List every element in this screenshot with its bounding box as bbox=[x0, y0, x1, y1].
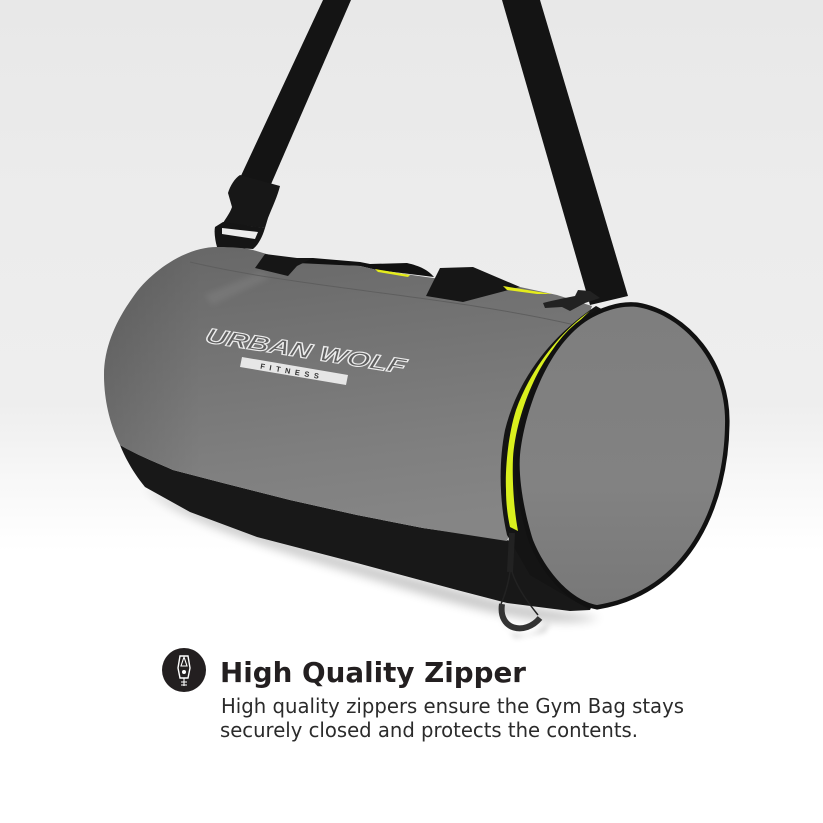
description bbox=[220, 694, 684, 742]
handle bases bbox=[255, 254, 520, 302]
feature block bbox=[162, 648, 684, 742]
logo: Urban Wolf Fitness: URBAN WOLF bbox=[203, 325, 410, 379]
body upper bbox=[104, 247, 592, 541]
fabric highlight bbox=[205, 272, 270, 305]
product: gym bag bbox=[104, 0, 725, 628]
description: High quality zippers ensure the Gym Bag stays bbox=[221, 694, 684, 718]
yellow zipper top bbox=[375, 269, 552, 294]
icon: zipper bbox=[162, 648, 206, 692]
end cap panel bbox=[520, 307, 725, 605]
zipper yellow bbox=[506, 311, 590, 531]
shoulder strap left bbox=[215, 0, 351, 249]
logo: Urban Wolf Fitness: FITNESS bbox=[260, 362, 324, 382]
zipper pull top bbox=[543, 290, 600, 311]
logo: Urban Wolf Fitness bbox=[203, 325, 410, 385]
shoulder strap right bbox=[502, 0, 628, 305]
bag lower black panel bbox=[120, 445, 590, 611]
handle webbing bbox=[297, 258, 434, 277]
bag shadow bbox=[145, 487, 600, 638]
heading: High Quality Zipper bbox=[220, 656, 526, 689]
description: securely closed and protects the contents. bbox=[220, 718, 638, 742]
end cap black backing bbox=[501, 306, 640, 610]
zipper pull cord and hook bbox=[501, 533, 540, 628]
stitch line bbox=[190, 262, 575, 325]
